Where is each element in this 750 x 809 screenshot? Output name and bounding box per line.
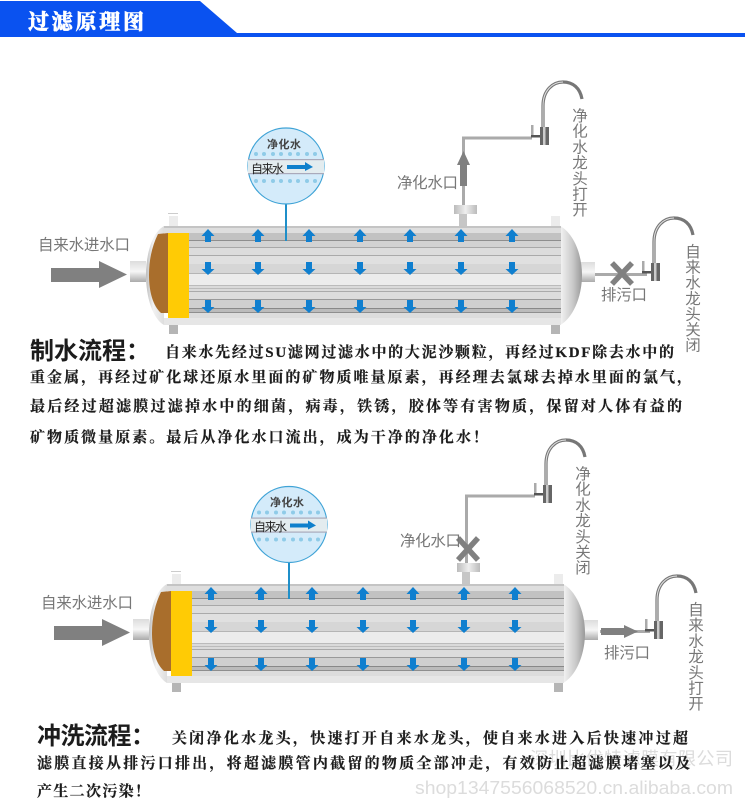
icon: outlet closed cross	[458, 538, 478, 560]
magnifier	[248, 128, 324, 204]
magnifier: 净化水	[270, 495, 304, 509]
icon: drain closed cross	[612, 263, 632, 284]
magnifier	[251, 486, 327, 562]
header banner	[0, 1, 745, 37]
drain pipe	[600, 630, 650, 633]
heading: 冲洗流程：	[37, 723, 155, 750]
magnifier: 自来水	[251, 162, 284, 176]
description: 重金属，再经过矿化球还原水里面的矿物质唯量原素，再经理去氯球去掉水里面的氯气，	[30, 368, 692, 387]
outlet flange	[457, 563, 480, 584]
text block: flushing process	[37, 723, 690, 800]
tank	[130, 213, 595, 334]
description	[30, 343, 692, 447]
title: 过滤原理图	[28, 10, 144, 34]
magnifier: 净化水	[267, 137, 301, 151]
magnifier: 自来水	[254, 520, 287, 534]
arrow: inlet	[51, 261, 127, 288]
description: 关闭净化水龙头，快速打开自来水龙头，使自来水进入后快速冲过超	[172, 729, 688, 748]
tank	[133, 571, 598, 692]
leader line	[288, 562, 290, 599]
icon: tap water faucet	[642, 218, 693, 281]
watermark: 深圳比优特滤膜有限公司	[530, 749, 733, 769]
label: drain: 排污口	[601, 286, 647, 304]
diagram: water production	[38, 82, 701, 355]
description: 最后经过超滤膜过滤掉水中的细菌，病毒，铁锈，胶体等有害物质，保留对人体有益的	[30, 397, 682, 416]
icon: purified faucet	[531, 82, 582, 145]
text block: water production process	[30, 338, 692, 447]
description: 自来水先经过SU滤网过滤水中的大泥沙颗粒，再经过KDF除去水中的	[165, 343, 674, 362]
label: purified faucet open: 净化水龙头打开	[572, 107, 588, 219]
outlet flange	[454, 205, 477, 226]
label: inlet: 自来水进水口	[41, 594, 133, 612]
description	[37, 729, 690, 800]
icon: tap water faucet	[645, 576, 696, 639]
flow arrows	[204, 587, 522, 671]
leader line	[285, 204, 287, 241]
diagram: flushing	[41, 440, 704, 713]
label: purified outlet: 净化水口	[397, 174, 458, 192]
drain pipe	[595, 273, 647, 276]
label: drain: 排污口	[604, 644, 650, 662]
description: 滤膜直接从排污口排出，将超滤膜管内截留的物质全部冲走，有效防止超滤膜堵塞以及	[37, 754, 690, 773]
label: purified faucet closed: 净化水龙头关闭	[575, 465, 591, 577]
label: inlet: 自来水进水口	[38, 236, 130, 254]
watermark	[415, 749, 733, 798]
description: 产生二次污染！	[37, 782, 150, 800]
purified water pipe	[466, 496, 535, 563]
label: tap faucet open: 自来水龙头打开	[688, 601, 704, 713]
arrow: inlet	[54, 619, 130, 646]
heading: 制水流程：	[30, 338, 150, 365]
arrow: drain flow	[601, 625, 638, 638]
label: tap faucet closed: 自来水龙头关闭	[685, 243, 701, 355]
purified water pipe	[464, 138, 532, 205]
watermark: shop1347556068520.cn.alibaba.com	[415, 778, 733, 798]
description: 矿物质微量原素。最后从净化水口流出，成为干净的净化水！	[30, 428, 488, 447]
arrow: purified outlet	[457, 151, 470, 186]
flow arrows	[202, 229, 518, 313]
label: purified outlet: 净化水口	[400, 532, 461, 550]
icon: purified faucet	[534, 440, 585, 503]
